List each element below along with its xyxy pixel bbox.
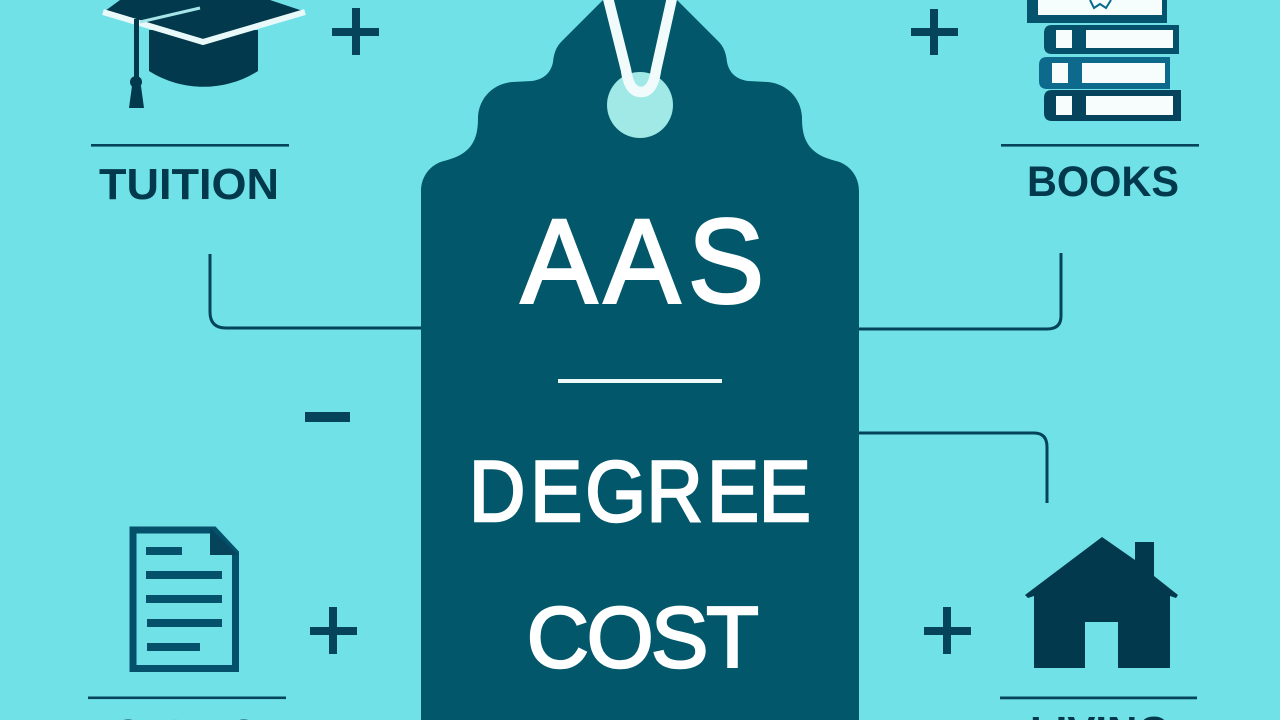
plus sign bbox=[332, 8, 379, 55]
label: tuition: TUITION bbox=[99, 160, 279, 209]
icon: stack of books bbox=[1027, 0, 1181, 121]
plus sign bbox=[911, 9, 958, 55]
divider bbox=[558, 379, 722, 383]
icon: house bbox=[1025, 537, 1178, 668]
connector: tuition to tag bbox=[210, 254, 422, 328]
minus sign bbox=[305, 412, 350, 422]
connector: living to tag bbox=[858, 433, 1047, 503]
panel: living bbox=[924, 537, 1197, 720]
panel: books bbox=[911, 0, 1199, 206]
divider line bbox=[91, 144, 289, 147]
plus sign bbox=[310, 607, 357, 654]
panel: supplies bbox=[88, 528, 357, 720]
label: books: BOOKS bbox=[1027, 158, 1179, 206]
price tag panel bbox=[421, 0, 859, 720]
icon: graduation cap bbox=[103, 0, 305, 108]
connector: books to tag bbox=[858, 253, 1061, 329]
icon: document bbox=[133, 528, 238, 668]
tag body bbox=[421, 0, 859, 720]
divider line bbox=[1000, 696, 1197, 699]
heading: COST: COST bbox=[527, 590, 759, 686]
tag string bbox=[608, 0, 672, 92]
heading: DEGREE: DEGREE bbox=[469, 445, 811, 540]
divider line bbox=[88, 696, 286, 699]
plus sign bbox=[924, 607, 971, 654]
tag hole bbox=[607, 72, 673, 138]
heading: AAS: AAS bbox=[521, 194, 764, 328]
divider line bbox=[1001, 144, 1199, 147]
panel: tuition bbox=[91, 0, 379, 209]
